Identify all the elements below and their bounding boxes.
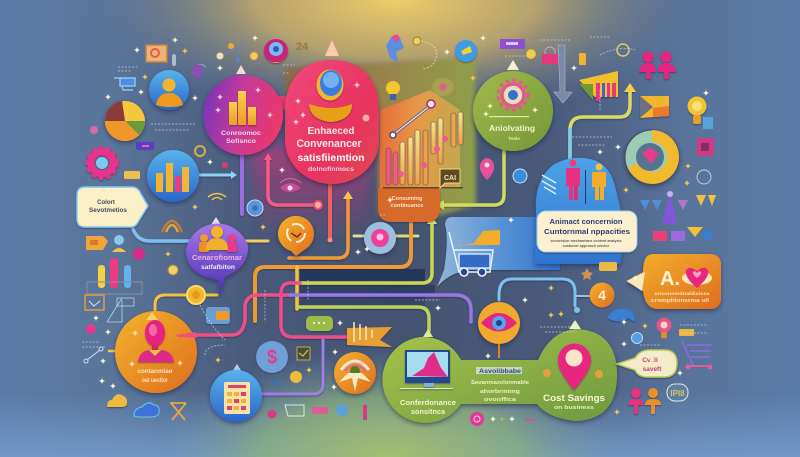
callout: approaches: conversion mechanisms content analysis (550, 239, 622, 243)
brown and olive backdrop panel (285, 58, 476, 215)
icon: green bubble (306, 316, 333, 331)
chart: rising bars (386, 112, 463, 185)
icon: rainbow cap circle (334, 352, 376, 394)
pipe: yellow top of orange circle (155, 286, 217, 312)
icon: heart (682, 268, 712, 288)
text: band caption: ovonffica (484, 397, 517, 403)
callout: A heart box (626, 254, 721, 309)
icon: map pin (558, 344, 591, 390)
text: main heading: dolnofinmocs (308, 167, 355, 173)
pipe: lime lower (299, 307, 429, 331)
text: number 24: 24 (296, 41, 309, 53)
panel: bar chart circle (147, 150, 199, 202)
pipe: blue from chart circle (196, 171, 237, 179)
icon: blue person small (112, 235, 126, 252)
pipe: yellow to top-right (570, 83, 636, 160)
icon: check box (297, 347, 310, 360)
icon: user circle (149, 70, 189, 110)
callout: overall savings: Cvell (642, 357, 658, 364)
text: purple label: Cenarofiomar (192, 255, 242, 262)
text: cost savings: Cost Savings (543, 393, 605, 404)
icon: target eye top (264, 39, 288, 63)
icon: small star (581, 268, 593, 280)
pipe: purple from pink circle (240, 154, 244, 214)
callout: approaches (537, 211, 637, 252)
pipe: purple long (290, 295, 471, 322)
icon: circle with pink dot (432, 78, 454, 96)
text: cost savings: on business (554, 405, 594, 411)
icon: number badge: 4 (598, 287, 606, 303)
callout: A heart box: unconomdnaldiaissa (654, 291, 710, 296)
pipe: pink elbow (264, 153, 322, 209)
pipe: light blue loop (132, 226, 190, 241)
text: main heading: satisfiiemtion (298, 152, 364, 164)
icon: bottom pink circle (470, 412, 484, 426)
panel: orange chart block (378, 90, 463, 222)
callout: overall savings: saveft (643, 366, 662, 373)
callout: colour satisfaction: Colort (97, 200, 115, 206)
panel: calculator circle (210, 364, 262, 422)
icon: arrow down (554, 45, 572, 103)
pipe: pink main (178, 295, 290, 335)
pipes (132, 83, 636, 394)
text: orange panel caption: Consuming (392, 196, 423, 202)
text: monitor caption: Conferdonance (400, 398, 456, 407)
pipe: blue above eye (499, 279, 590, 313)
pipe: pink second (281, 283, 350, 337)
icon: small pink eye (280, 178, 301, 192)
icon: calendar calculator (224, 382, 250, 414)
pipe: purple bottom (250, 340, 323, 394)
icon: bar wedge (579, 71, 618, 101)
callout: A heart box: cromphlonsrma oll (651, 298, 710, 304)
icon: yellow arcs (208, 194, 226, 200)
icon: envelope shape (640, 96, 669, 118)
callout: approaches: Cuntornmal nppacities (544, 227, 630, 236)
callout: A heart box: A. (660, 268, 680, 290)
icon: tv check (85, 295, 104, 310)
dark pipe channels (300, 269, 435, 306)
icon: donut ring (625, 130, 679, 184)
text: circle label (221, 130, 261, 145)
icon: yellow bulb (386, 81, 400, 100)
callout: colour satisfaction (77, 187, 148, 227)
icon: pink node (364, 222, 396, 254)
pin icon (480, 158, 494, 180)
text: band caption: ahorbrmimg (480, 389, 520, 395)
icon: right small set (697, 117, 714, 184)
panel: green band (382, 320, 617, 423)
icon: wifi rainbow (193, 65, 206, 77)
callout: overall savings (617, 350, 677, 377)
icon: purple block (500, 39, 525, 49)
icon: lightbulb (688, 96, 706, 124)
icon: blue badge (247, 200, 263, 216)
icon: bag (542, 47, 558, 64)
icon: dollar coin (256, 341, 288, 373)
icon: badge text (667, 384, 688, 401)
pipe: lime to yellow (298, 216, 437, 283)
pipe: link to node (354, 234, 366, 238)
panel: purple circle (186, 217, 248, 295)
text: purple label: satfafbiton (201, 264, 235, 271)
pipe: red drop (328, 183, 332, 242)
icon: blue card (206, 307, 230, 324)
icon: rainbow arc (162, 221, 182, 232)
panel: orange person circle (115, 311, 197, 393)
panel: pink purple circle (203, 65, 283, 155)
text: monitor caption: sonsitnca (411, 409, 445, 416)
text: green label: Tools (508, 136, 520, 141)
icon: eye circle (478, 302, 520, 358)
icon: people pair (639, 52, 676, 79)
icon: pink person (138, 320, 174, 362)
text: cost savings (543, 393, 605, 411)
sparkles (93, 35, 709, 422)
text: main heading: Convenancer (296, 138, 362, 150)
icon: team (199, 226, 237, 252)
callout: approaches: customer approach service (563, 244, 609, 248)
icon: purple cart (682, 341, 712, 370)
callout: approaches: Animact concernion (550, 217, 623, 226)
icon: framed picture (146, 45, 167, 62)
icon: link node (84, 347, 103, 363)
icon: chat bubble CAI (440, 169, 460, 188)
text: circle label: Sofisnco (226, 139, 256, 145)
icon: small cart (114, 78, 135, 90)
text: purple label (192, 255, 242, 271)
icon: purple small tag (136, 142, 154, 150)
panel: blue people panel (535, 158, 623, 264)
text: band caption (471, 367, 529, 403)
icon: pie chart (105, 101, 145, 141)
icon: molecule network (216, 42, 258, 62)
icon: fish (607, 309, 635, 322)
text: green label (489, 123, 535, 141)
icon: people bottom (628, 388, 661, 414)
icon: head and hands (309, 70, 352, 122)
pipe: lime from green circle (436, 139, 509, 210)
panel: cart background (437, 217, 560, 287)
icon: badge text: IPI8 (670, 389, 685, 398)
icon: pink top figure (386, 34, 404, 62)
text: orange label: oat ueuttor (142, 378, 169, 384)
text: orange label: contanmiao (138, 368, 173, 375)
pipe: yellow stub (246, 240, 268, 242)
text: monitor caption (400, 398, 456, 416)
arrow: orange up (289, 191, 353, 258)
icon: small dark icons bottom (268, 404, 365, 420)
text: green label: Aniolvating (489, 123, 535, 133)
icon: gold arrows (696, 195, 716, 206)
panel: green circle (473, 60, 553, 151)
pipe: vertical gold (295, 267, 299, 309)
pipe: long orange (255, 210, 416, 321)
icon: chat bubble CAI: CAI (444, 175, 456, 182)
icon: monitor chart (400, 350, 453, 389)
icon: number badge (590, 282, 614, 308)
icon: yellow person (592, 164, 606, 200)
text: orange label (138, 368, 173, 384)
text: band caption: Asvolibbabe (479, 369, 522, 375)
text: circle label: Conroomoc (221, 130, 261, 137)
panel: large pink circle (245, 40, 379, 184)
icon: blue coin (455, 40, 477, 62)
text: orange panel caption: continuance (391, 203, 423, 209)
icon: shopping cart (449, 230, 500, 276)
icon: gear (87, 148, 117, 178)
icon: speech circle orange (278, 216, 314, 256)
icon: blue cloud (134, 403, 159, 417)
icon: dollar coin: $ (267, 347, 277, 367)
icon: crossed tools (170, 403, 186, 420)
chart: mini bars (87, 258, 142, 294)
icon: purple figure row (640, 191, 688, 224)
icon: gear (498, 80, 528, 110)
text: main heading (296, 125, 364, 173)
backdrop under pink circles (250, 145, 370, 235)
icon: yellow cloud (107, 394, 127, 407)
icon: pink person (566, 160, 580, 200)
icon: pink bulb (656, 318, 672, 338)
icon: small squares (653, 227, 713, 241)
fine detail lines (82, 37, 708, 355)
callout: colour satisfaction: Sevotmetios (89, 208, 128, 214)
chart: yellow bars (229, 91, 256, 125)
text: orange panel caption (391, 196, 423, 209)
icon: gold tag (86, 236, 108, 250)
icon: gold arrow tag (347, 322, 392, 347)
text: band caption: Savanmazelonmable (471, 380, 529, 386)
text: main heading: Enhaeced (308, 125, 354, 137)
